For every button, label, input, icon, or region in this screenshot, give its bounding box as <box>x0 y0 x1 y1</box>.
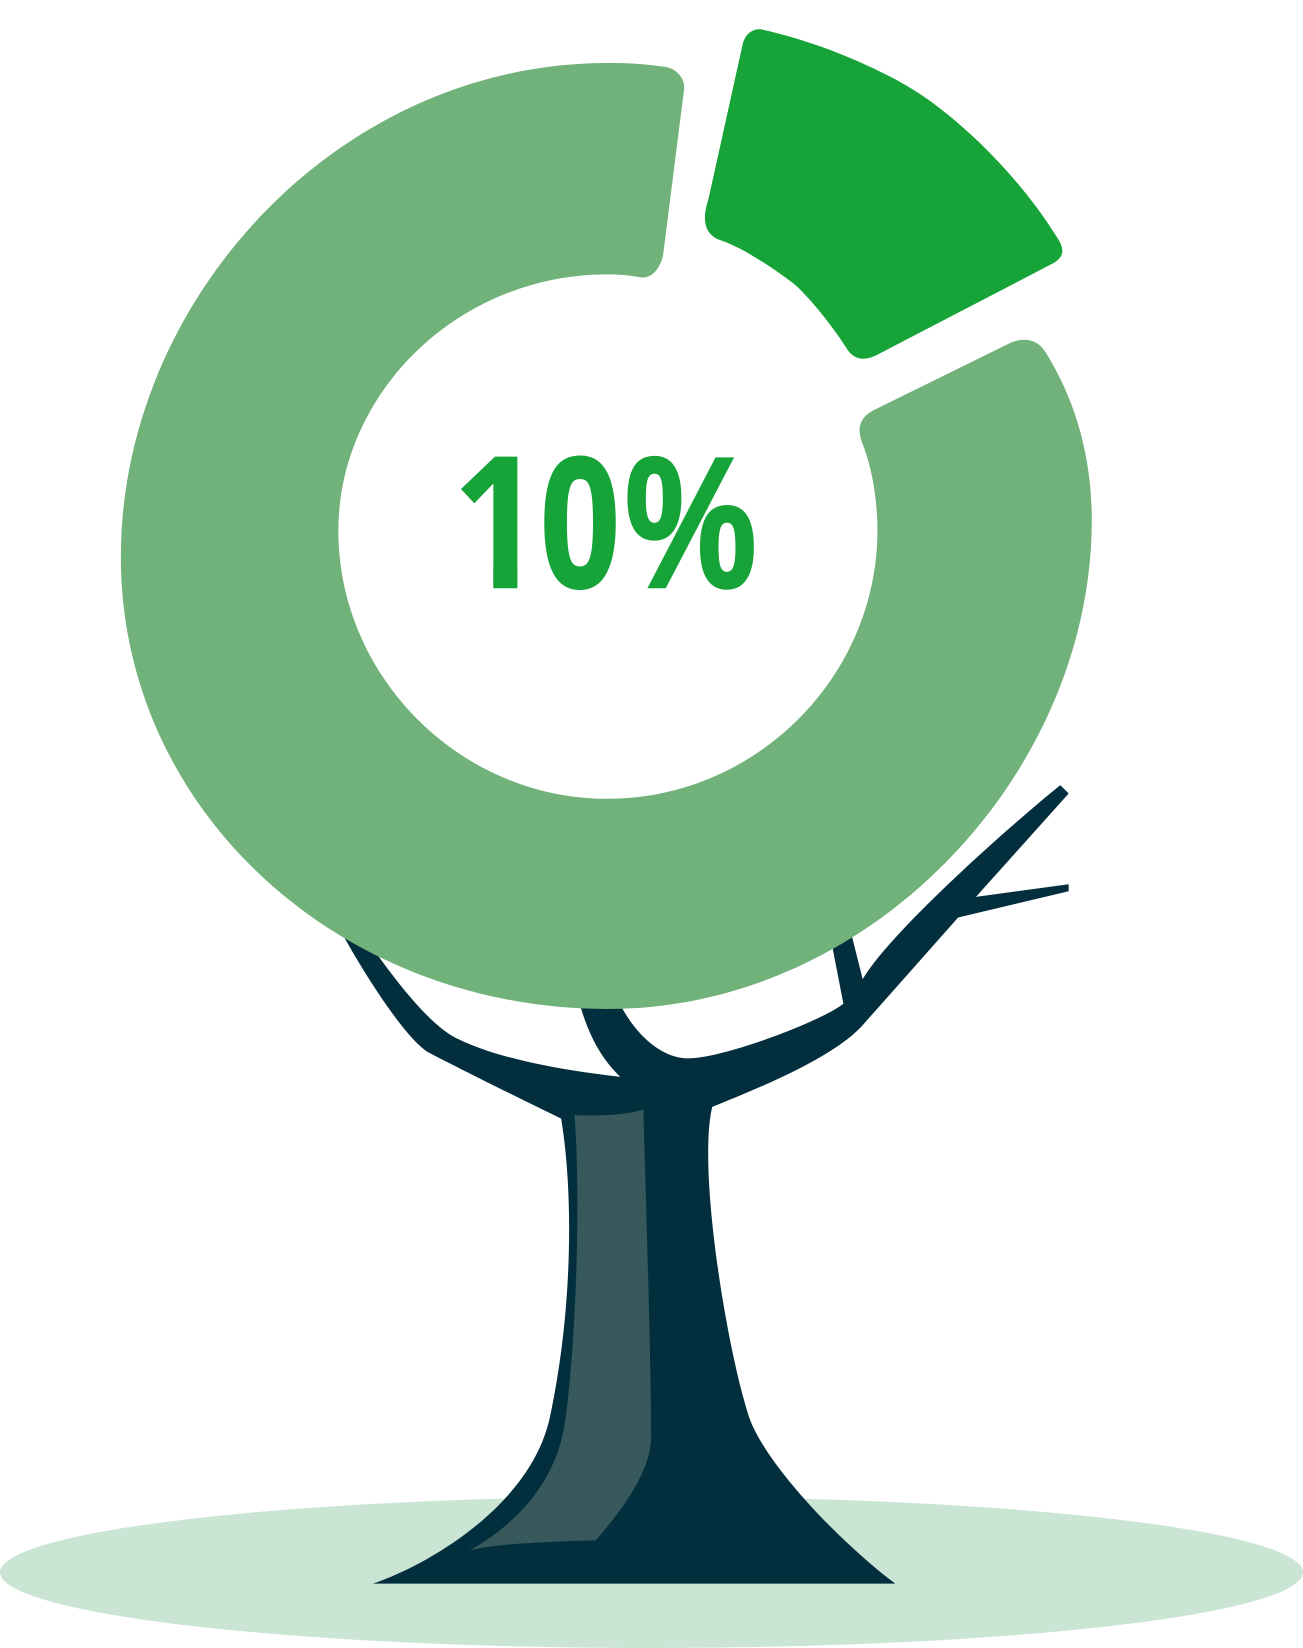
tree trunk and branches <box>336 785 1069 1584</box>
percentage label: 0 <box>540 420 620 627</box>
trunk highlight <box>469 1110 651 1551</box>
ground ellipse <box>0 1497 1303 1648</box>
percentage label: % <box>625 421 756 626</box>
percentage label <box>455 420 756 627</box>
donut chart: highlighted 10 percent segment <box>705 29 1062 359</box>
percentage label: 1 <box>461 420 543 626</box>
donut chart: remaining 90 percent segment <box>121 63 1092 1009</box>
